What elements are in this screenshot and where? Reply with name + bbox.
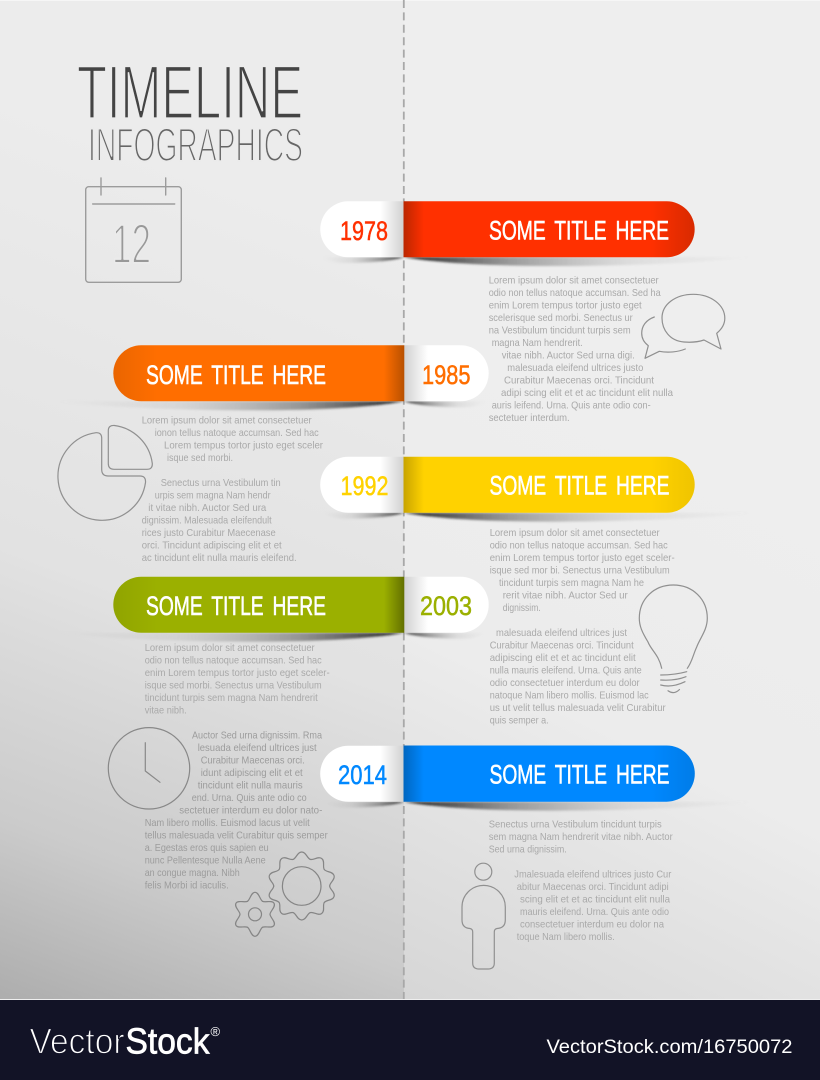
timeline item 2014 <box>320 746 754 811</box>
timeline item 1985 <box>54 345 489 410</box>
text block 1978: malesuada eleifend ultrices justo <box>507 362 643 374</box>
text block 1992: rerit vitae nibh. Auctor Sed ur <box>503 590 628 602</box>
text block 1985: ionon tellus natoque accumsan. Sed hac <box>155 427 319 439</box>
title bar blue <box>404 746 695 802</box>
text block 2014: Senectus urna Vestibulum tincidunt turpis <box>489 818 662 830</box>
text block 1992: odio consectetuer interdum eu dolor <box>490 677 640 689</box>
title bar orange <box>113 345 404 401</box>
background: left page half <box>0 0 404 1000</box>
timeline item 2003 <box>54 577 489 642</box>
shadows under 2003 tab <box>54 633 486 642</box>
shadows under 2014 tab <box>322 802 754 811</box>
text block 2003: Curabitur Maecenas orci. <box>201 754 305 766</box>
text block 2014 <box>489 818 673 943</box>
footer logo <box>30 1020 220 1061</box>
text block 1992: Curabitur Maecenas orci. Tincidunt <box>490 640 634 652</box>
icon: speech bubbles <box>642 294 725 358</box>
text block 1978: vitae nibh. Auctor Sed urna digi. <box>502 349 635 361</box>
text block 2003: isque sed morbi. Senectus urna Vestibulum <box>145 680 322 692</box>
text block 1978: odio non tellus natoque accumsan. Sed ha <box>489 287 661 299</box>
year 1992: 1992 <box>340 471 388 501</box>
title: TIMELINE: TIMELINE <box>77 50 303 136</box>
dashed centre timeline axis <box>403 0 405 999</box>
text block 1992: us ut velit tellus malesuada velit Curabitur <box>490 702 666 714</box>
text block 1978: Lorem ipsum dolor sit amet consectetuer <box>489 274 659 286</box>
icon: person <box>462 863 505 969</box>
text block 2014: toque Nam libero mollis. <box>517 931 615 943</box>
text block 1978: sectetuer interdum. <box>489 412 570 424</box>
year 2003: 2003 <box>420 591 472 621</box>
text block 2003: end. Urna. Quis ante odio co <box>192 792 307 804</box>
text block 1985: Lorem ipsum dolor sit amet consectetuer <box>142 414 312 426</box>
title <box>77 50 303 171</box>
text block 1992: Lorem ipsum dolor sit amet consectetuer <box>490 527 660 539</box>
icon: gears <box>232 852 337 936</box>
year pill 1978 <box>320 201 404 257</box>
text block 1992: nulla mauris eleifend. Urna. Quis ante <box>490 664 642 676</box>
text block 1978: Curabitur Maecenas orci. Tincidunt <box>504 374 654 386</box>
text block 2003: nunc Pellentesque Nulla Aene <box>145 854 266 866</box>
text block 1992: enim Lorem tempus tortor justo eget sceler- <box>490 552 675 564</box>
text block 2003: Lorem ipsum dolor sit amet consectetuer <box>145 642 315 654</box>
text block 1978: auris leifend. Urna. Quis ante odio con- <box>492 399 651 411</box>
footer url: VectorStock.com/16750072 <box>546 1036 792 1058</box>
text block 1978: na Vestibulum tincidunt turpis sem <box>489 324 631 336</box>
text block 1978: adipi scing elit et et ac tincidunt elit nulla <box>501 387 673 399</box>
text block 2003: tincidunt elit nulla mauris <box>198 780 303 792</box>
text block 1992: quis semper a. <box>490 714 549 726</box>
text block 1992: malesuada eleifend ultrices just <box>496 627 627 639</box>
shadows under 1985 tab <box>54 401 486 410</box>
heading: SOME TITLE HERE <box>490 760 670 790</box>
timeline item 1992 <box>320 457 754 522</box>
text block 2014: abitur Maecenas orci. Tincidunt adipi <box>517 881 669 893</box>
heading: SOME TITLE HERE <box>490 470 670 500</box>
text block 1992: odio non tellus natoque accumsan. Sed hac <box>490 540 668 552</box>
title bar green <box>113 577 404 633</box>
text block 2003: idunt adipiscing elit et et <box>201 767 303 779</box>
text block 1985: rices justo Curabitur Maecenase <box>142 527 276 539</box>
shadows under 1992 tab <box>322 513 754 522</box>
text block 1978: magna Nam hendrerit. <box>492 337 583 349</box>
text block 1985 <box>142 414 323 564</box>
text block 1985: it vitae nibh. Auctor Sed ura <box>148 502 266 514</box>
text block 1985: Senectus urna Vestibulum tin <box>161 477 281 489</box>
footer logo: ® <box>210 1024 220 1039</box>
heading: SOME TITLE HERE <box>489 216 669 246</box>
text block 1978 <box>489 274 673 424</box>
text block 1992: tincidunt turpis sem magna Nam he <box>499 577 644 589</box>
text block 1978: enim Lorem tempus tortor justo eget <box>489 299 642 311</box>
text block 2014: consectetuer interdum eu dolor na <box>520 918 664 930</box>
text block 1985: isque sed morbi. <box>167 452 233 464</box>
text block 2014: Sed urna dignissim. <box>489 843 567 855</box>
icon: pie chart <box>58 425 152 520</box>
text block 2003: enim Lorem tempus tortor justo eget sceler- <box>145 667 330 679</box>
text block 2003: Nam libero mollis. Euismod lacus ut velit <box>145 817 310 829</box>
year pill 2014 <box>320 746 404 802</box>
text block 2003: sectetuer interdum eu dolor nato- <box>179 804 323 816</box>
text block 1992: dignissim. <box>503 602 541 614</box>
text block 2014: sem magna Nam hendrerit vitae nibh. Auctor <box>489 831 673 843</box>
heading: SOME TITLE HERE <box>146 591 326 621</box>
text block 2003: tincidunt turpis sem magna Nam hendrerit <box>145 692 318 704</box>
text block 2003: odio non tellus natoque accumsan. Sed hac <box>145 654 322 666</box>
title bar yellow <box>404 457 695 513</box>
text block 1992: adipiscing elit et et ac tincidunt elit <box>490 652 636 664</box>
year pill 2003 <box>404 577 489 633</box>
text block 1985: urpis sem magna Nam hendr <box>155 489 271 501</box>
text block 1985: dignissim. Malesuada eleifendult <box>142 514 272 526</box>
text block 2003: lesuada eleifend ultrices just <box>198 742 317 754</box>
icon: calendar <box>86 178 181 282</box>
text block 2014: scing elit et et ac tincidunt elit nulla <box>520 893 670 905</box>
title: INFOGRAPHICS: INFOGRAPHICS <box>88 118 303 171</box>
text block 1985: ac tincidunt elit nulla mauris eleifend. <box>142 552 297 564</box>
text block 1978: scelerisque sed morbi. Senectus ur <box>489 312 633 324</box>
year pill 1992 <box>320 457 404 513</box>
heading: SOME TITLE HERE <box>146 360 326 390</box>
text block 2003: vitae nibh. <box>145 704 187 716</box>
footer logo: Vector <box>30 1020 125 1061</box>
text block 2003: an congue magna. Nibh <box>145 867 240 879</box>
text block 2014: mauris eleifend. Urna. Quis ante odio <box>520 906 669 918</box>
year pill 1985 <box>404 345 489 401</box>
year 1985: 1985 <box>422 360 470 390</box>
footer logo: Stock <box>126 1020 210 1061</box>
year 1978: 1978 <box>340 216 388 246</box>
background: right page half <box>404 0 820 1000</box>
text block 2003 <box>145 642 330 892</box>
year 2014: 2014 <box>338 760 387 790</box>
text block 2014: Jmalesuada eleifend ultrices justo Cur <box>514 868 672 880</box>
icon: light bulb <box>639 585 707 693</box>
shadows under 1978 tab <box>322 257 754 266</box>
icon: calendar: 12 <box>112 212 151 275</box>
text block 1992: natoque Nam libero mollis. Euismod lac <box>490 690 649 702</box>
icon: clock <box>108 728 190 809</box>
title bar red <box>404 201 695 257</box>
text block 1992 <box>490 527 675 726</box>
footer bar <box>0 1000 820 1080</box>
text block 2003: tellus malesuada velit Curabitur quis semper <box>145 830 328 842</box>
text block 2003: felis Morbi id iaculis. <box>145 880 229 892</box>
text block 2003: Auctor Sed urna dignissim. Rma <box>192 730 322 742</box>
text block 1985: Lorem tempus tortor justo eget sceler <box>164 439 323 451</box>
text block 1992: isque sed mor bi. Senectus urna Vestibulum <box>490 564 670 576</box>
text block 2003: a. Egestas eros quis sapien eu <box>145 842 269 854</box>
timeline item 1978 <box>320 201 754 266</box>
text block 1985: orci. Tincidunt adipiscing elit et et <box>142 539 282 551</box>
